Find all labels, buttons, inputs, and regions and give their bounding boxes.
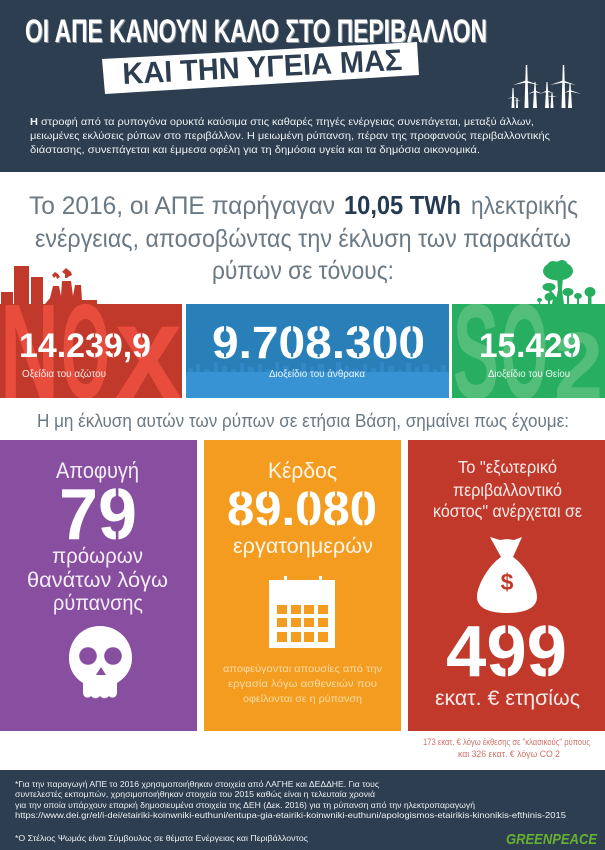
main heading [29,190,578,285]
panel: SO2: S [453,276,499,427]
panel: SO2: O [501,276,548,427]
icon: money bag: $ [501,569,514,595]
icon: wind turbines [507,65,581,108]
NOx value: 14.239,9 [19,327,151,365]
main heading: 10,05 TWh [344,190,461,220]
workdays note: αποφεύγονται απουσίες από την [223,663,382,675]
main heading: ρύπων σε τόνους: [212,257,394,285]
cost caption: εκατ. € ετησίως [435,687,580,710]
panel: CO2 [186,304,449,398]
author note: *Ο Στέλιος Ψωμάς είναι Σύμβουλος σε θέματα Ενέργειας και Περιβάλλοντος [15,833,308,843]
panel: NOx: N [0,276,59,427]
intro text: μειωμένες εκλύσεις ρύπων στο περιβάλλον. Η μειωμένη ρύπανση, πέραν της προφανούς περιβαλλοντικής [30,130,550,142]
cost number: 499 [446,612,567,692]
sources text: για την οποία υπάρχουν επαρκή δημοσιευμένα στοιχεία της ΔΕΗ (Δεκ. 2016) για τη ρύπανση από την ηλεκτροπαραγωγή [15,800,475,810]
cost lead-in [433,457,582,521]
panel: NOx: O [61,276,110,427]
panel: header [0,0,605,172]
workdays note: οφείλονται σε η ρύπανση [243,693,362,705]
panel: external cost [408,440,605,731]
cost footnote: και 326 εκατ. € λόγω CO 2 [458,749,560,759]
workdays caption: εργατοημερών [233,535,373,558]
icon: factory skyline [1,266,97,304]
SO2 value: 15.429 [479,327,581,365]
icon: skull [69,626,132,698]
workdays note [223,663,382,705]
icon: trees [537,260,596,304]
subheading: Η μη έκλυση αυτών των ρύπων σε ετήσια Βάση, σημαίνει πως έχουμε: [37,410,569,431]
SO2 label: Διοξείδιο του Θείου [488,368,570,380]
CO2 label: Διοξείδιο του άνθρακα [269,368,365,380]
cost footnote [423,737,591,759]
icon: calendar [269,576,335,648]
sources text [15,779,566,843]
deaths number: 79 [59,475,137,555]
panel: NOx: x [115,276,182,427]
panel: SO2 [452,304,605,398]
deaths caption: πρόωρων [52,545,143,568]
deaths caption: θανάτων λόγω [27,569,168,592]
panel: workdays [204,440,401,731]
NOx label: Οξείδια του αζώτου [22,368,106,380]
cost lead-in: κόστος" ανέρχεται σε [433,501,582,521]
panel: NOx [0,304,182,398]
deaths caption [27,545,168,615]
title line two on white band: ΚΑΙ ΤΗΝ ΥΓΕΙΑ ΜΑΣ [122,44,403,91]
sources text: https://www.dei.gr/el/i-dei/etairiki-koinwniki-euthuni/entupa-gia-etairiki-koinwniki-euthuni/apologismos-etairikis-kinonikis-efthinis-2015 [15,810,566,820]
workdays note: εργασία λόγω ασθενειών που [228,678,377,690]
panel: avoided deaths [0,440,197,731]
main heading: ηλεκτρικής [471,192,578,220]
sources text: *Για την παραγωγή ΑΠΕ το 2016 χρησιμοποιήθηκαν στοιχεία από ΛΑΓΗΕ και ΔΕΔΔΗΕ. Για τους [15,779,379,789]
deaths lead-in: Αποφυγή [56,458,139,483]
workdays lead-in: Κέρδος [268,458,337,483]
cost lead-in: περιβαλλοντικό [453,480,562,500]
panel: footer [0,770,605,850]
intro text: Η στροφή από τα ρυπογόνα ορυκτά καύσιμα στις καθαρές πηγές ενέργειας συνεπάγεται, μεταξύ άλλων, [30,116,534,128]
sources text: συντελεστές εκπομπών, χρησιμοποιήθηκαν στοιχεία του 2015 καθώς είναι η τελευταία χρονιά [15,789,375,799]
deaths caption: ρύπανσης [53,592,143,615]
CO2 value: 9.708.300 [212,317,425,368]
main heading: ενέργειας, αποσοβώντας την έκλυση των παρακάτω [35,225,571,253]
main heading: Το 2016, οι ΑΠΕ παρήγαγαν [29,192,335,220]
cost lead-in: Το "εξωτερικό [458,457,557,477]
workdays number: 89.080 [227,483,377,536]
icon: money bag [477,537,537,613]
intro text [30,116,550,156]
intro text: διάστασης, συνεπάγεται και έμμεσα οφέλη για τη δημόσια υγεία και τα δημόσια οικονομικά. [30,144,480,156]
